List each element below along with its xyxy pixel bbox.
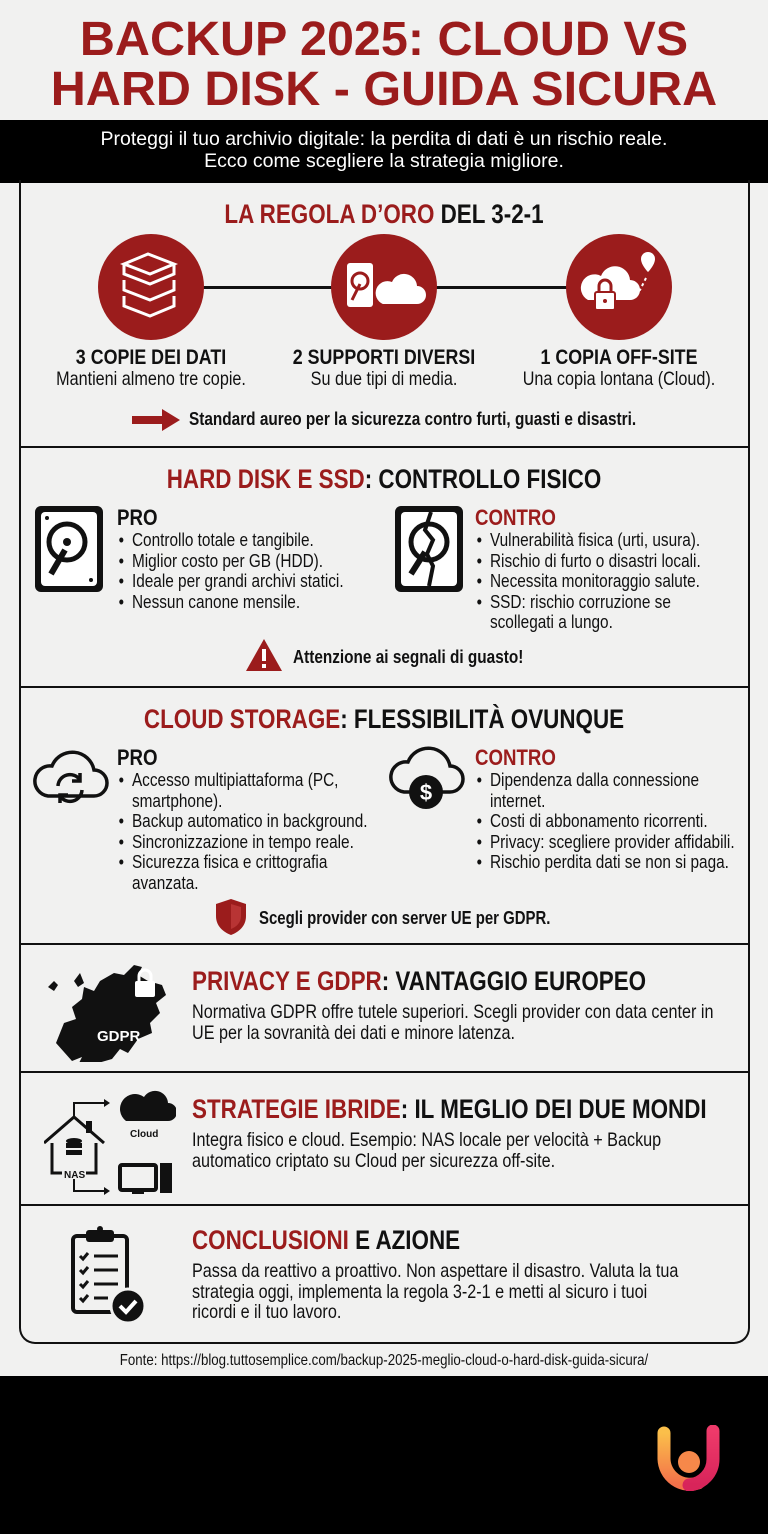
- icon: cloud lock pin: [566, 234, 672, 340]
- panel: hybrid: [44, 1090, 707, 1195]
- pro list cloud: avanzata.: [132, 872, 199, 892]
- step 2 text: 2 SUPPORTI DIVERSI: [293, 345, 475, 369]
- source: Fonte: https://blog.tuttosemplice.com/backup-2025-meglio-cloud-o-hard-disk-guida-sicura/: [120, 1352, 648, 1369]
- text privacy: Normativa GDPR offre tutele superiori. Scegli provider con data center in UE per la sovranità dei dati e minore latenza.: [192, 1001, 713, 1044]
- text conclusions: Passa da reattivo a proattivo. Non aspettare il disastro. Valuta la tua: [192, 1260, 678, 1282]
- pro list disk: Ideale per grandi archivi statici.: [132, 570, 344, 591]
- step 2 text: [293, 345, 475, 390]
- icon: hybrid NAS: [44, 1090, 176, 1195]
- pro list cloud: Sicurezza fisica e crittografia: [132, 851, 327, 872]
- contro list disk: Necessita monitoraggio salute.: [490, 570, 700, 591]
- panel: cloud: [33, 704, 735, 935]
- contro list disk: [475, 505, 701, 632]
- icon: europe map: GDPR: [97, 1028, 141, 1045]
- text conclusions: [192, 1260, 678, 1323]
- icon: arrow: [132, 409, 180, 431]
- pro list cloud: PRO: [117, 745, 157, 770]
- title: HARD DISK - GUIDA SICURA: [51, 62, 717, 116]
- subtitle band: Proteggi il tuo archivio digitale: la perdita di dati è un rischio reale.: [101, 128, 667, 150]
- main panel: [19, 180, 750, 1344]
- heading 3-2-1: LA REGOLA D’ORO DEL 3-2-1: [224, 199, 544, 229]
- contro list cloud: CONTRO: [475, 745, 556, 770]
- callout: warning: [246, 639, 523, 671]
- callout: GDPR tip: [216, 899, 550, 935]
- pro list disk: Miglior costo per GB (HDD).: [132, 550, 323, 570]
- step 2 text: Su due tipi di media.: [311, 368, 457, 390]
- footer band: [0, 1376, 768, 1534]
- text conclusions: ricordi e il tuo lavoro.: [192, 1301, 341, 1323]
- icon: hybrid NAS: NAS: [64, 1170, 85, 1181]
- step 3 text: Una copia lontana (Cloud).: [523, 368, 715, 390]
- heading privacy: PRIVACY E GDPR: VANTAGGIO EUROPEO: [192, 966, 646, 996]
- contro list cloud: Privacy: scegliere provider affidabili.: [490, 830, 735, 852]
- contro list disk: CONTRO: [475, 505, 556, 530]
- title: BACKUP 2025: CLOUD VS: [80, 12, 688, 66]
- heading conclusions: CONCLUSIONI E AZIONE: [192, 1225, 460, 1255]
- pro list cloud: smartphone).: [132, 790, 222, 810]
- icon: hard disk: [35, 506, 103, 592]
- contro list disk: SSD: rischio corruzione se: [490, 590, 671, 612]
- panel: privacy: [48, 965, 713, 1062]
- contro list cloud: Rischio perdita dati se non si paga.: [490, 851, 729, 872]
- pro list disk: PRO: [117, 505, 157, 530]
- pro list disk: [117, 505, 344, 612]
- panel: hard disk: [35, 464, 701, 671]
- icon: broken disk: [395, 506, 463, 592]
- panel: 3-2-1 rule: [56, 199, 715, 431]
- pro list disk: Controllo totale e tangibile.: [132, 529, 314, 550]
- pro list cloud: Backup automatico in background.: [132, 810, 368, 831]
- contro list disk: Vulnerabilità fisica (urti, usura).: [490, 529, 700, 550]
- icon: cloud sync: [33, 750, 109, 804]
- icon: shield: [216, 899, 246, 935]
- icon: europe map: [48, 965, 166, 1062]
- callout: GDPR tip: Scegli provider con server UE per GDPR.: [259, 908, 550, 928]
- step 3 text: 1 COPIA OFF-SITE: [541, 345, 697, 369]
- icon: cloud cost: [389, 746, 465, 809]
- title: [51, 12, 717, 116]
- heading hard disk: HARD DISK E SSD: CONTROLLO FISICO: [167, 464, 601, 494]
- contro list cloud: Dipendenza dalla connessione: [490, 769, 699, 790]
- icon: hybrid NAS: Cloud: [130, 1129, 158, 1140]
- step 1 text: Mantieni almeno tre copie.: [56, 368, 246, 390]
- subtitle band: Ecco come scegliere la strategia migliore.: [204, 150, 564, 172]
- connector line: [150, 286, 620, 289]
- panel: conclusions: [71, 1225, 678, 1323]
- icon: warning: [246, 639, 282, 671]
- contro list cloud: [475, 745, 735, 872]
- subtitle band: [0, 120, 768, 183]
- contro list cloud: internet.: [490, 790, 545, 810]
- heading hybrid: STRATEGIE IBRIDE: IL MEGLIO DEI DUE MONDI: [192, 1094, 707, 1124]
- pro list cloud: [117, 745, 368, 892]
- icon: clipboard: [71, 1226, 144, 1322]
- text conclusions: strategia oggi, implementa la regola 3-2-1 e metti al sicuro i tuoi: [192, 1280, 647, 1302]
- contro list disk: scollegati a lungo.: [490, 611, 613, 632]
- heading cloud: CLOUD STORAGE: FLESSIBILITÀ OVUNQUE: [144, 704, 624, 734]
- pro list disk: Nessun canone mensile.: [132, 590, 300, 612]
- step 3 text: [523, 345, 715, 390]
- callout: standard: Standard aureo per la sicurezza contro furti, guasti e disastri.: [189, 408, 636, 429]
- pro list cloud: Sincronizzazione in tempo reale.: [132, 830, 354, 852]
- text hybrid: Integra fisico e cloud. Esempio: NAS locale per velocità + Backup automatico criptato su Cloud per sicurezza off-site.: [192, 1129, 661, 1172]
- icon: disk and cloud: [331, 234, 437, 340]
- contro list cloud: Costi di abbonamento ricorrenti.: [490, 810, 708, 831]
- logo: [658, 1425, 720, 1491]
- pro list cloud: Accesso multipiattaforma (PC,: [132, 769, 338, 790]
- contro list disk: Rischio di furto o disastri locali.: [490, 550, 701, 570]
- icon: cloud cost: $: [420, 780, 432, 805]
- icon: server stack: [98, 234, 204, 340]
- callout: warning: Attenzione ai segnali di guasto!: [293, 646, 523, 667]
- step 1 text: [56, 345, 246, 390]
- step 1 text: 3 COPIE DEI DATI: [76, 345, 226, 369]
